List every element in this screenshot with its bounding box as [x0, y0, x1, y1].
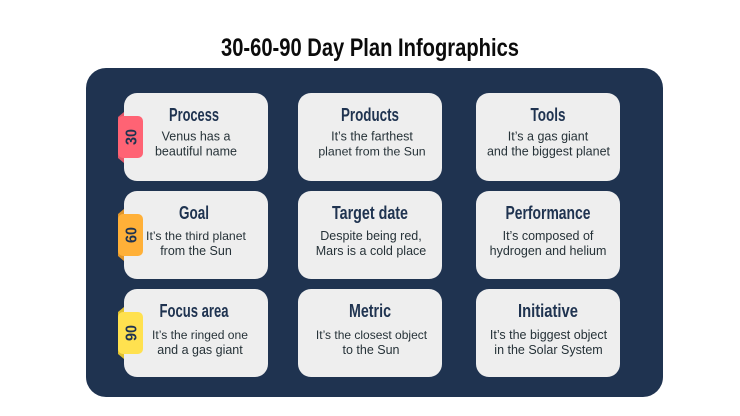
text: Products description: planet from the Sun — [318, 144, 426, 158]
card: Target date — [298, 191, 442, 279]
heading: Focus area: Focus area — [160, 301, 229, 321]
heading: Metric: Metric — [349, 301, 391, 321]
card: Performance — [476, 191, 620, 279]
text: Focus area description: and a gas giant — [157, 343, 243, 357]
heading: Tools: Tools — [530, 105, 566, 125]
heading: Target date: Target date — [332, 203, 408, 223]
card: Focus area — [124, 289, 268, 377]
heading: Process: Process — [169, 105, 219, 125]
text: Products description: It’s the farthest — [331, 130, 413, 144]
card: Products — [298, 93, 442, 181]
tab: 60: 60 — [124, 227, 140, 243]
text: Tools description: It’s a gas giant — [508, 130, 588, 144]
card: Tools — [476, 93, 620, 181]
text: Process description: beautiful name — [155, 144, 237, 158]
heading: Products: Products — [341, 105, 399, 125]
card: Metric — [298, 289, 442, 377]
tab: 30 — [118, 112, 143, 163]
text: Initiative description: It’s the biggest object — [490, 328, 607, 342]
tab: 90 — [118, 307, 143, 359]
text: Focus area description: It’s the ringed one — [152, 328, 248, 342]
tab: 90: 90 — [124, 325, 140, 341]
text: Goal description: It’s the third planet — [146, 229, 247, 243]
text: Goal description: from the Sun — [160, 244, 232, 258]
tab: 60 — [118, 209, 143, 261]
heading: Performance: Performance — [506, 203, 590, 223]
card: Process — [124, 93, 268, 181]
panel: dark background — [86, 68, 663, 397]
text: Target date description: Despite being red, — [320, 229, 422, 243]
text: Metric description: to the Sun — [342, 343, 400, 357]
text: Initiative description: in the Solar System — [494, 343, 603, 357]
text: Tools description: and the biggest planet — [487, 144, 611, 158]
card: Goal — [124, 191, 268, 279]
text: Target date description: Mars is a cold place — [316, 244, 426, 258]
tab: 30: 30 — [124, 129, 140, 145]
card: Initiative — [476, 289, 620, 377]
title: 30-60-90 Day Plan Infographics — [221, 34, 519, 62]
text: Metric description: It’s the closest object — [316, 328, 428, 342]
heading: Goal: Goal — [179, 203, 209, 223]
text: Performance description: It’s composed of — [503, 229, 593, 243]
text: Process description: Venus has a — [162, 130, 230, 144]
text: Performance description: hydrogen and helium — [490, 244, 606, 258]
heading: Initiative: Initiative — [518, 301, 578, 321]
